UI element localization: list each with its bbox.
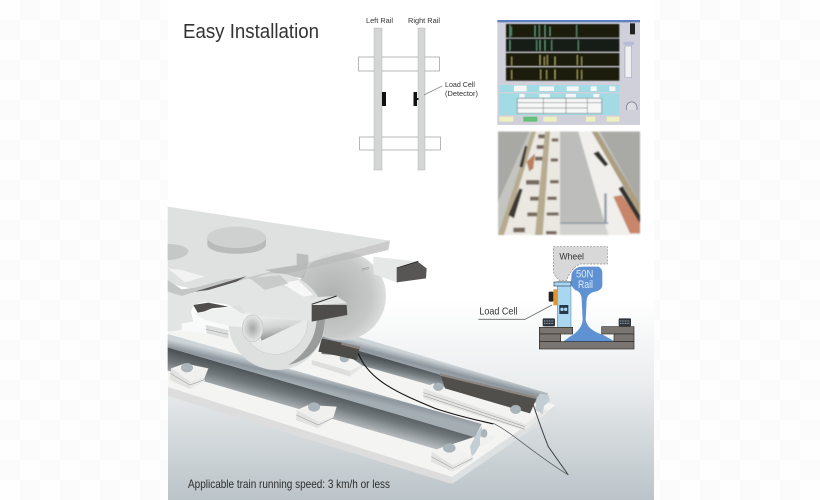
floor bbox=[498, 132, 640, 235]
left rail bbox=[374, 28, 382, 170]
results panel bbox=[499, 93, 619, 115]
right pale zone bbox=[578, 132, 640, 235]
window bbox=[497, 20, 640, 125]
top plate bbox=[168, 207, 390, 290]
bolt icon bbox=[559, 305, 568, 314]
guard foot bbox=[206, 325, 228, 338]
bottom fence zone bbox=[560, 223, 608, 235]
axle body bbox=[252, 317, 303, 341]
upper sleeper bbox=[358, 57, 440, 71]
back rail head bbox=[322, 326, 548, 404]
back clamp bbox=[312, 354, 362, 377]
long clamp bolts bbox=[433, 383, 521, 414]
left load cell bbox=[382, 92, 386, 106]
right load cells bbox=[593, 151, 640, 223]
rail end bbox=[470, 426, 483, 457]
near rail bbox=[168, 334, 493, 449]
near rail right end bbox=[431, 423, 568, 475]
load cell leader bbox=[424, 86, 442, 95]
right load cell bbox=[414, 92, 418, 106]
wheel text mark bbox=[362, 267, 369, 270]
base plates bbox=[539, 327, 634, 349]
left rails bbox=[498, 132, 550, 235]
left ballast bbox=[503, 132, 560, 235]
button: green bbox=[523, 117, 537, 122]
frame inner shade bbox=[250, 275, 288, 290]
front wheel inner bbox=[242, 289, 308, 354]
label: load cell: Load Cell bbox=[479, 307, 517, 318]
spring disk left bbox=[168, 244, 188, 260]
far load cell top bbox=[440, 373, 537, 399]
orange load cell bbox=[553, 289, 557, 305]
right clamp bolt bbox=[619, 318, 631, 326]
back arm bbox=[373, 257, 427, 282]
clamp centre bbox=[296, 402, 337, 428]
near load cell top bbox=[341, 343, 360, 349]
screenshot: monitoring software bbox=[497, 20, 640, 125]
block cap bbox=[554, 282, 571, 286]
side frame bbox=[168, 278, 347, 332]
back wheel bbox=[297, 252, 386, 340]
buttons: yellow bbox=[499, 117, 619, 122]
long clamp bbox=[423, 383, 547, 431]
axle end bbox=[242, 315, 263, 342]
parameter bar bbox=[499, 85, 619, 92]
dark sliver bbox=[195, 276, 247, 292]
track slab bbox=[168, 330, 556, 484]
wheel bbox=[553, 247, 607, 281]
rail body bbox=[560, 267, 615, 344]
back rail bbox=[312, 326, 548, 404]
photo content bbox=[498, 132, 640, 235]
slab side bbox=[168, 387, 452, 484]
frame inner bright bbox=[282, 280, 313, 297]
left bright panel bbox=[168, 268, 205, 282]
left floor bbox=[498, 132, 529, 202]
front arm end bbox=[312, 305, 347, 322]
bogie bbox=[168, 207, 427, 370]
small indicator bbox=[630, 23, 635, 34]
back rail web bbox=[322, 340, 445, 389]
waveform strips bbox=[506, 24, 619, 81]
far load cell bbox=[440, 373, 537, 413]
slab top bbox=[168, 330, 556, 477]
front arm line bbox=[312, 296, 337, 304]
far wire lower bbox=[533, 405, 568, 475]
lower guard bbox=[193, 307, 257, 327]
label: rail: Rail bbox=[578, 279, 593, 291]
side value column bbox=[625, 46, 632, 78]
front clamp bbox=[431, 443, 473, 472]
spring column bbox=[265, 253, 308, 278]
right rail bbox=[418, 28, 425, 170]
label: 50N: 50N bbox=[576, 268, 593, 280]
title bar bbox=[497, 20, 640, 22]
small end clamp bbox=[480, 429, 497, 447]
slab right shade bbox=[452, 405, 556, 484]
label: load cell: Load Cell bbox=[445, 80, 475, 89]
diagram: rail cross section bbox=[478, 247, 634, 349]
near rail web bbox=[168, 347, 475, 449]
fixing block bbox=[557, 282, 571, 327]
spring disk main bbox=[207, 227, 266, 254]
right floor bbox=[600, 132, 640, 203]
left clamp bolt bbox=[543, 318, 555, 326]
load cell leader bbox=[478, 305, 552, 319]
title: Easy Installation bbox=[183, 21, 319, 43]
rail end bbox=[535, 393, 550, 414]
panel: white page with gradient bbox=[168, 0, 654, 500]
label: left rail: Left Rail bbox=[366, 16, 393, 25]
near wire tail bbox=[493, 423, 568, 475]
back rail right end bbox=[423, 373, 568, 475]
central floor bbox=[560, 132, 608, 223]
label: wheel: Wheel bbox=[559, 251, 584, 261]
dial bbox=[626, 102, 637, 110]
lower sleeper bbox=[360, 137, 440, 150]
front wheel rim bbox=[228, 273, 325, 370]
input fields bbox=[514, 86, 615, 97]
walkway rail bbox=[560, 193, 608, 224]
black sensor bbox=[549, 292, 553, 302]
clamp left bbox=[170, 363, 208, 389]
column header bbox=[623, 42, 634, 45]
fittings bbox=[513, 134, 559, 234]
label: detector: (Detector) bbox=[445, 89, 478, 98]
frame window dark bbox=[193, 303, 228, 314]
photo: installed load cells on track bbox=[498, 132, 640, 235]
front wheel flange bbox=[288, 317, 325, 365]
near wire bbox=[358, 353, 493, 424]
illustration: bogie on track bbox=[168, 207, 568, 484]
near rail head bbox=[168, 334, 482, 437]
red ballast bbox=[613, 195, 640, 233]
top plate front band bbox=[195, 241, 390, 294]
back arm end bbox=[397, 262, 427, 282]
near load cell bbox=[318, 338, 360, 360]
frame link band bbox=[168, 277, 247, 296]
left load cells bbox=[508, 146, 527, 218]
label: right rail: Right Rail bbox=[408, 16, 440, 25]
results table bbox=[517, 98, 602, 113]
diagram: rail plan view bbox=[358, 16, 478, 170]
caption: running speed: Applicable train running speed: 3 km/h or less bbox=[188, 477, 390, 491]
right rail bbox=[592, 132, 640, 215]
